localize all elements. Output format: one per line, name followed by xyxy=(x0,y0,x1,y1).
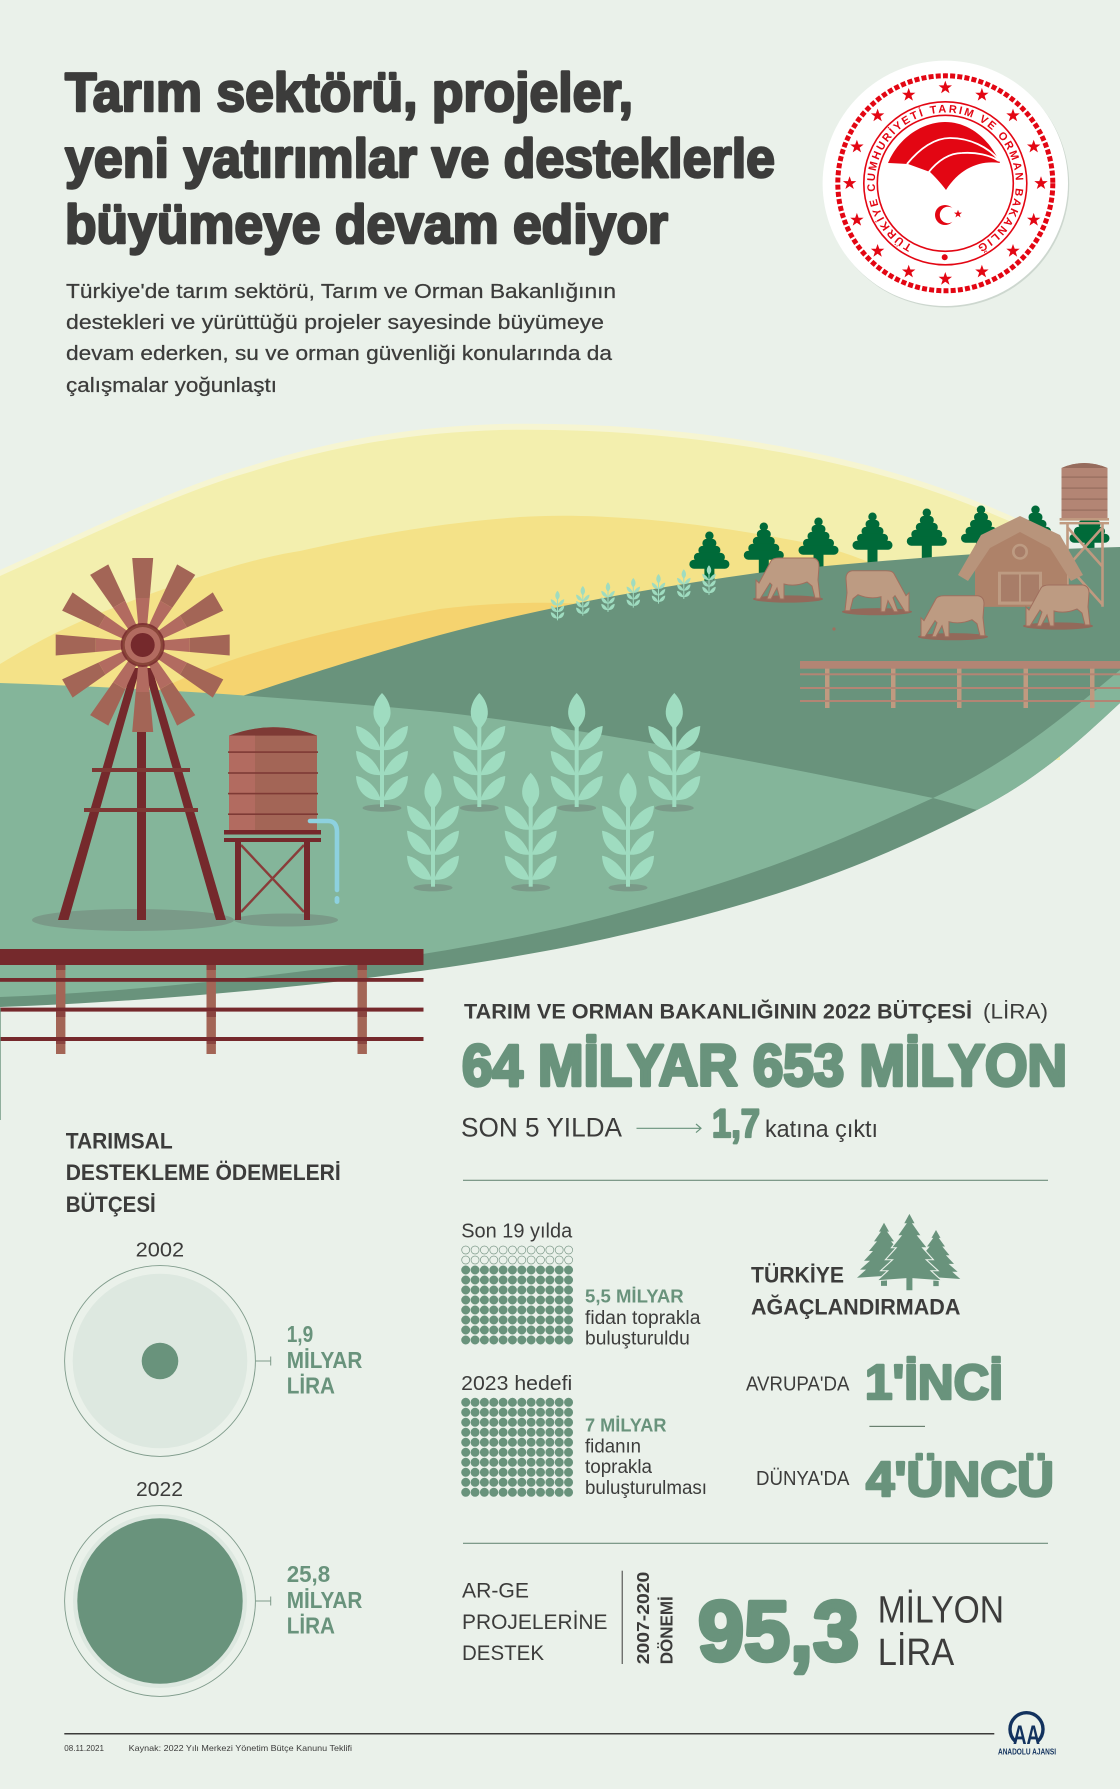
hill: light green strip xyxy=(933,670,1120,810)
footer xyxy=(64,1733,994,1753)
rank: Europe: 1'İNCİ xyxy=(865,1356,1003,1410)
water tower with tap xyxy=(224,727,339,926)
five year growth row xyxy=(461,1102,878,1146)
circle chart 2002: 2002 xyxy=(136,1240,184,1262)
footer: 08.11.2021 xyxy=(64,1743,104,1753)
title: Tarım sektörü, projeler, xyxy=(65,61,633,123)
circle chart 2022: LİRA xyxy=(287,1613,335,1639)
small fence xyxy=(800,661,1120,708)
cow 2 xyxy=(842,571,912,615)
small water tower xyxy=(1060,463,1109,607)
seedlings 5.5 billion caption: buluşturuldu xyxy=(585,1328,690,1349)
barn xyxy=(958,516,1083,607)
title: yeni yatırımlar ve desteklerle xyxy=(65,127,775,189)
seedlings 7 billion caption xyxy=(585,1415,707,1499)
hill: deep yellow xyxy=(140,603,600,760)
budget heading: TARIM VE ORMAN BAKANLIĞININ 2022 BÜTÇESİ xyxy=(464,998,972,1023)
five year growth row: katına çıktı xyxy=(765,1116,878,1143)
seedlings last 19 years: label: Son 19 yılda xyxy=(461,1220,573,1242)
seedlings 7 billion caption: 7 MİLYAR xyxy=(585,1415,666,1436)
circle chart 2002: 1,9 xyxy=(287,1321,313,1347)
hill: light green foreground xyxy=(0,683,933,997)
support payments heading: TARIMSAL xyxy=(66,1129,173,1154)
period label rotated: 2007-2020 xyxy=(633,1571,653,1664)
five year growth row: SON 5 YILDA xyxy=(461,1113,622,1143)
circle chart 2002: LİRA xyxy=(287,1373,335,1399)
wheat plants field xyxy=(356,693,700,891)
support payments heading xyxy=(66,1129,341,1217)
period label rotated: DÖNEMİ xyxy=(656,1596,676,1664)
intro text block: destekleri ve yürüttüğü projeler sayesinde büyümeye xyxy=(66,312,604,334)
R&D support label: AR-GE xyxy=(462,1580,529,1603)
seedlings 5.5 billion caption: 5,5 MİLYAR xyxy=(585,1286,684,1307)
rank: World xyxy=(756,1453,1054,1507)
logo: Anadolu Ajansı: ANADOLU AJANSI xyxy=(998,1748,1056,1756)
intro text block: devam ederken, su ve orman güvenliği konularında da xyxy=(66,343,613,365)
hill: pale sky glow xyxy=(0,424,1060,760)
title: büyümeye devam ediyor xyxy=(65,193,668,255)
circle chart 2002: MİLYAR xyxy=(287,1347,363,1373)
R&D big figure: MİLYON xyxy=(878,1589,1004,1632)
dot grid: 7 billion xyxy=(466,1402,569,1492)
afforestation heading xyxy=(751,1263,961,1319)
budget big figure: 64 MİLYAR 653 MİLYON xyxy=(462,1034,1067,1099)
icon: forest trees xyxy=(857,1213,960,1291)
dot grid: 5.5 billion xyxy=(462,1246,573,1340)
seedlings 5.5 billion caption: fidan toprakla xyxy=(585,1308,701,1329)
R&D support label xyxy=(462,1580,608,1665)
afforestation heading: TÜRKİYE xyxy=(751,1263,844,1288)
logo: Anadolu Ajansı xyxy=(998,1713,1056,1756)
windmill xyxy=(32,558,234,931)
intro text block: çalışmalar yoğunlaştı xyxy=(66,375,277,397)
budget heading: (LİRA) xyxy=(983,999,1048,1023)
rank: Europe xyxy=(746,1356,1003,1410)
intro text block xyxy=(66,281,616,397)
hill: light yellow xyxy=(0,430,1060,760)
seedlings 7 billion caption: toprakla xyxy=(585,1457,652,1478)
support payments heading: DESTEKLEME ÖDEMELERİ xyxy=(66,1160,341,1185)
footer: Kaynak: 2022 Yılı Merkezi Yönetim Bütçe Kanunu Teklifi xyxy=(129,1743,352,1753)
circle chart 2022 xyxy=(65,1479,363,1696)
R&D big figure xyxy=(698,1584,1004,1678)
pine tree row xyxy=(689,506,1110,597)
intro text block: Türkiye'de tarım sektörü, Tarım ve Orman Bakanlığının xyxy=(66,281,616,303)
dot xyxy=(832,627,836,631)
support payments heading: BÜTÇESİ xyxy=(66,1192,156,1217)
rank: Europe: AVRUPA'DA xyxy=(746,1374,850,1396)
R&D support label: DESTEK xyxy=(462,1642,544,1665)
circle chart 2022: 25,8 xyxy=(287,1561,330,1587)
seedlings 2023 target: label: 2023 hedefi xyxy=(461,1373,572,1395)
seedlings 7 billion caption: buluşturulması xyxy=(585,1478,707,1499)
small sprouts row xyxy=(551,565,716,620)
title xyxy=(65,61,775,255)
R&D big figure: 95,3 xyxy=(698,1584,859,1678)
seedlings 7 billion caption: fidanın xyxy=(585,1437,641,1458)
hill: mid yellow xyxy=(0,516,900,760)
circle chart 2002 xyxy=(65,1240,363,1456)
five year growth row: 1,7 xyxy=(712,1102,760,1146)
R&D big figure: LİRA xyxy=(878,1631,955,1674)
cow 3 xyxy=(918,596,988,640)
circle chart 2022: MİLYAR xyxy=(287,1587,363,1613)
hill: dark green xyxy=(0,547,1120,1007)
rank: World: DÜNYA'DA xyxy=(756,1468,850,1490)
logo: ministry seal xyxy=(822,60,1070,308)
seedlings 5.5 billion caption xyxy=(585,1286,701,1349)
rank: World: 4'ÜNCÜ xyxy=(866,1453,1054,1507)
R&D support label: PROJELERİNE xyxy=(462,1611,608,1634)
afforestation heading: AĞAÇLANDIRMADA xyxy=(751,1294,961,1319)
logo: Anadolu Ajansı: AA xyxy=(1013,1720,1040,1750)
cow 1 xyxy=(753,558,823,603)
circle chart 2022: 2022 xyxy=(136,1479,183,1501)
large fence xyxy=(0,949,424,1054)
cow 4 xyxy=(1023,585,1093,630)
period label rotated xyxy=(633,1571,676,1664)
